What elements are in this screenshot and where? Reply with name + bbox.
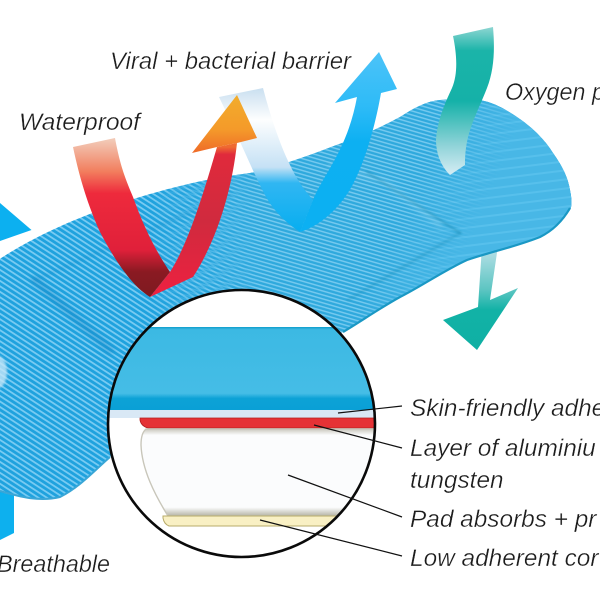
right ribbon [150,143,237,297]
label: breathable: Breathable [0,551,110,578]
red aluminium layer [140,418,380,428]
arrow: viral white ribbon [219,88,313,232]
label: aluminium layer: Layer of aluminiu [410,435,596,462]
label: waterproof: Waterproof [19,109,142,136]
skin-friendly layer [100,410,390,418]
mid stripes [162,100,572,333]
arrow: lower teal oxygen arrow [443,246,518,350]
label: viral barrier: Viral + bacterial barrier [110,48,352,75]
arrow: oxygen teal ribbon [436,27,494,175]
blue backing layer [100,327,390,410]
label: skin-friendly: Skin-friendly adhe [410,395,600,422]
right end texture [374,100,572,310]
absorbent pad [141,429,380,516]
plaster lower edge [343,208,570,332]
faded arrow under plaster [0,356,7,388]
magnifier circle [100,290,390,557]
label: tungsten: tungsten [410,467,504,494]
arrow: breathable blue arrow tail [0,485,14,540]
label: low adherent: Low adherent cor [410,545,599,572]
low adherent layer [163,516,340,526]
arrow: blue arm rising [300,52,397,232]
plaster lower left edge [0,457,110,499]
label: pad: Pad absorbs + pr [410,506,597,533]
orange head [192,95,257,153]
arrow: left cropped blue arrow head [0,203,32,241]
leader lines [260,406,402,556]
plaster strip [0,100,572,500]
arrow: waterproof red ribbon [73,95,257,297]
pad outline [35,165,460,350]
left ribbon [73,138,170,297]
